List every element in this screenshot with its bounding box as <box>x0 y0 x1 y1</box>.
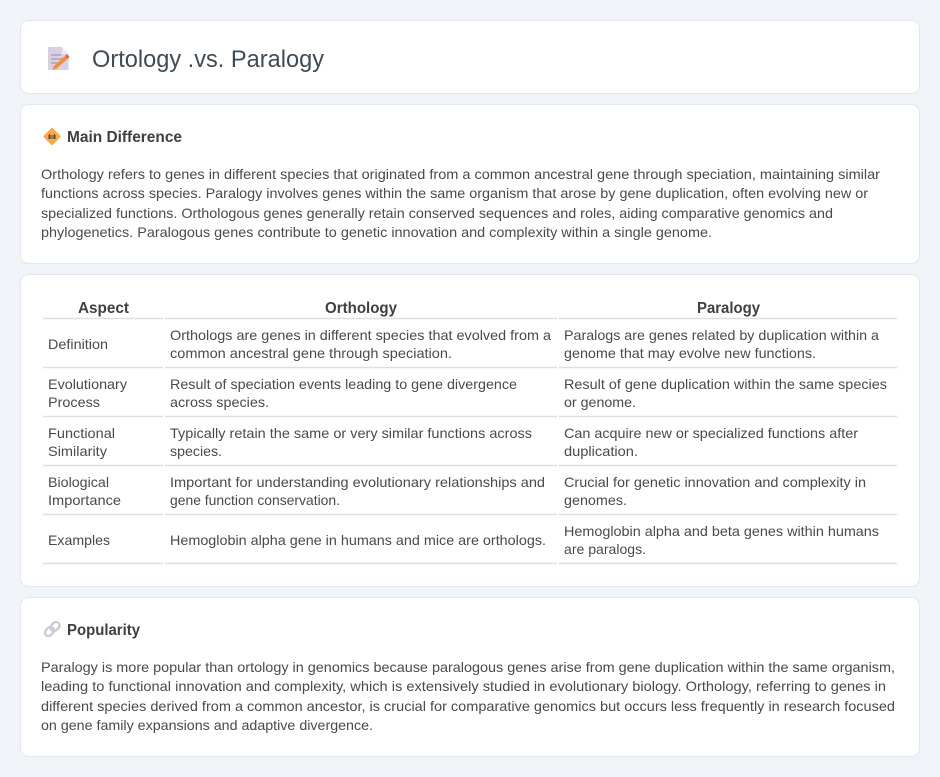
table row: definition <box>48 327 879 361</box>
panel: header <box>20 20 920 94</box>
table row: examples <box>48 523 879 557</box>
table row: definition: common ancestral gene through speciation. <box>170 345 452 361</box>
icon: chain link <box>43 620 61 638</box>
table row: definition: Definition <box>48 336 108 352</box>
table row: examples: Hemoglobin alpha and beta genes within humans <box>564 523 879 539</box>
table header row: Aspect <box>78 300 130 317</box>
table row: functional similarity: Can acquire new or specialized functions after <box>564 425 858 441</box>
title: Ortology .vs. Paralogy <box>92 46 324 73</box>
text block: main difference: phylogenetics. Paralogous genes contribute to genetic innovation and complexity within a single genome. <box>41 224 712 240</box>
table row: evolutionary process: Result of gene duplication within the same species <box>564 376 887 392</box>
text block: popularity: on gene family expansions and adaptive divergence. <box>41 717 373 733</box>
table row: evolutionary process: or genome. <box>564 394 636 410</box>
table row: evolutionary process: Evolutionary <box>48 376 127 392</box>
text block: popularity: different species derived from a common ancestor, is crucial for comparative genomics but occurs less frequently in research focused <box>41 698 895 714</box>
table header row: Paralogy <box>697 300 760 317</box>
icon: document with pencil <box>48 47 70 70</box>
text block: main difference: specialized functions. Orthologous genes generally retain conserved sequences and roles, aiding comparative genomics and <box>41 205 833 221</box>
table row: examples: are paralogs. <box>564 541 646 557</box>
text block: main difference: Orthology refers to genes in different species that originated from a common ancestral gene through speciation, maintaining similar <box>41 166 880 182</box>
table row: functional similarity <box>48 425 858 459</box>
text block: popularity: leading to functional innovation and complexity, which is extensively studied in evolutionary biology. Orthology, referring to genes in <box>41 678 886 694</box>
table row: biological importance: genomes. <box>564 492 627 508</box>
table row: definition: genome that may evolve new functions. <box>564 345 816 361</box>
table row: definition: Paralogs are genes related by duplication within a <box>564 327 879 343</box>
table row: biological importance: gene function conservation. <box>170 492 340 508</box>
table row: evolutionary process: across species. <box>170 394 269 410</box>
table row: biological importance: Crucial for genetic innovation and complexity in <box>564 474 866 490</box>
table row: biological importance <box>48 474 866 508</box>
table header row <box>78 300 760 317</box>
heading: popularity: Popularity <box>67 622 140 639</box>
heading: main difference: Main Difference <box>67 129 182 146</box>
table row: biological importance: Biological <box>48 474 109 490</box>
table row: examples: Examples <box>48 532 110 548</box>
table row: examples: Hemoglobin alpha gene in humans and mice are orthologs. <box>170 532 546 548</box>
table row: functional similarity: Typically retain the same or very similar functions across <box>170 425 532 441</box>
table row: evolutionary process <box>48 376 887 410</box>
icon: diamond sign <box>44 128 60 144</box>
table row: evolutionary process: Process <box>48 394 100 410</box>
text block: popularity <box>41 659 895 733</box>
text block: main difference: functions across species. Paralogy involves genes within the same organism that arose by gene duplication, often evolving new or <box>41 185 868 201</box>
panel: popularity <box>20 598 920 756</box>
panel: main difference <box>20 104 920 264</box>
table header row: Orthology <box>325 300 397 317</box>
table row: evolutionary process: Result of speciation events leading to gene divergence <box>170 376 517 392</box>
panel: comparison table <box>20 274 920 586</box>
table row: biological importance: Importance <box>48 492 121 508</box>
table row: functional similarity: duplication. <box>564 443 638 459</box>
table row: biological importance: Important for understanding evolutionary relationships and <box>170 474 545 490</box>
text block: popularity: Paralogy is more popular than ortology in genomics because paralogous genes arise from gene duplication within the same organism, <box>41 659 895 675</box>
text block: main difference <box>41 166 880 240</box>
table row: functional similarity: Similarity <box>48 443 107 459</box>
table row: functional similarity: species. <box>170 443 222 459</box>
table row: functional similarity: Functional <box>48 425 115 441</box>
table row: definition: Orthologs are genes in different species that evolved from a <box>170 327 551 343</box>
